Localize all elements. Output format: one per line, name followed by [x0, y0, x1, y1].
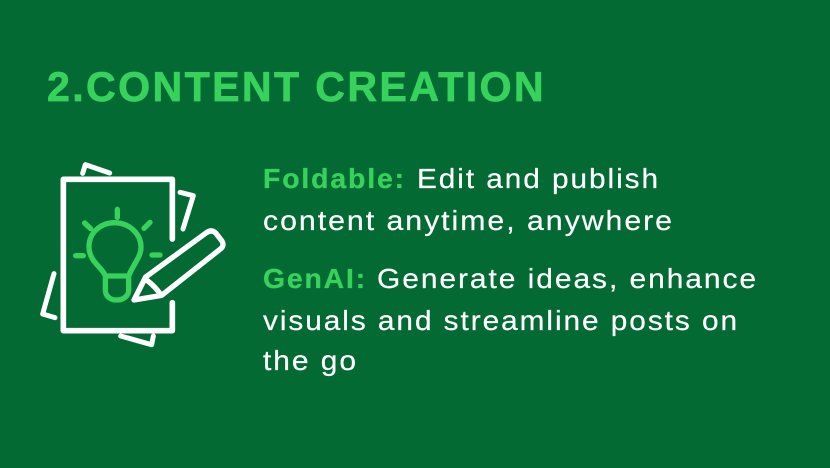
icon: pencil [134, 231, 223, 300]
Foldable line 2: content anytime, anywhere [263, 205, 674, 236]
text block: GenAI [263, 263, 758, 376]
Foldable label: Foldable: [263, 163, 406, 194]
text block: Foldable [263, 163, 674, 236]
icon: idea sheet with pencil [43, 165, 223, 345]
icon: paper sheet [63, 179, 172, 331]
icon: paper corner marks [43, 165, 193, 345]
GenAI label: GenAI: [263, 263, 367, 294]
icon: light bulb [76, 209, 160, 300]
GenAI line 1: Generate ideas, enhance [377, 263, 758, 294]
GenAI line 3: the go [263, 345, 358, 376]
title: 2.CONTENT CREATION [47, 63, 546, 110]
Foldable line 1: Edit and publish [417, 163, 660, 194]
GenAI line 2: visuals and streamline posts on [263, 305, 739, 336]
